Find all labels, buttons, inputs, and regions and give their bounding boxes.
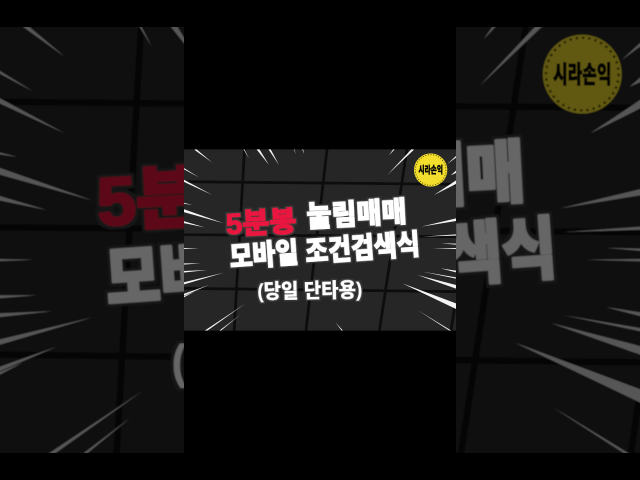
icon: logo badge bbox=[414, 153, 447, 187]
panel: centre thumbnail bbox=[181, 147, 459, 333]
background title line 1: 눌림매매 bbox=[286, 136, 527, 223]
title line 1: 눌림매매 bbox=[306, 196, 407, 234]
speed lines bbox=[183, 149, 456, 331]
black side gutter behind centre panel bbox=[184, 0, 456, 480]
background subtitle: (당일 단타용) bbox=[171, 332, 421, 389]
background title line 2: 모바일 조건검색식 bbox=[103, 212, 559, 319]
background logo badge bbox=[543, 35, 622, 114]
subtitle: (당일 단타용) bbox=[257, 278, 363, 303]
background title line 1 bbox=[95, 136, 527, 241]
background title line 1: 5분봉 bbox=[95, 157, 266, 241]
title line 1: 5분봉 bbox=[225, 205, 297, 241]
title line 2: 모바일 조건검색식 bbox=[229, 229, 421, 274]
icon: logo badge: 시라손익 bbox=[418, 164, 443, 177]
title line 1 bbox=[225, 196, 408, 241]
